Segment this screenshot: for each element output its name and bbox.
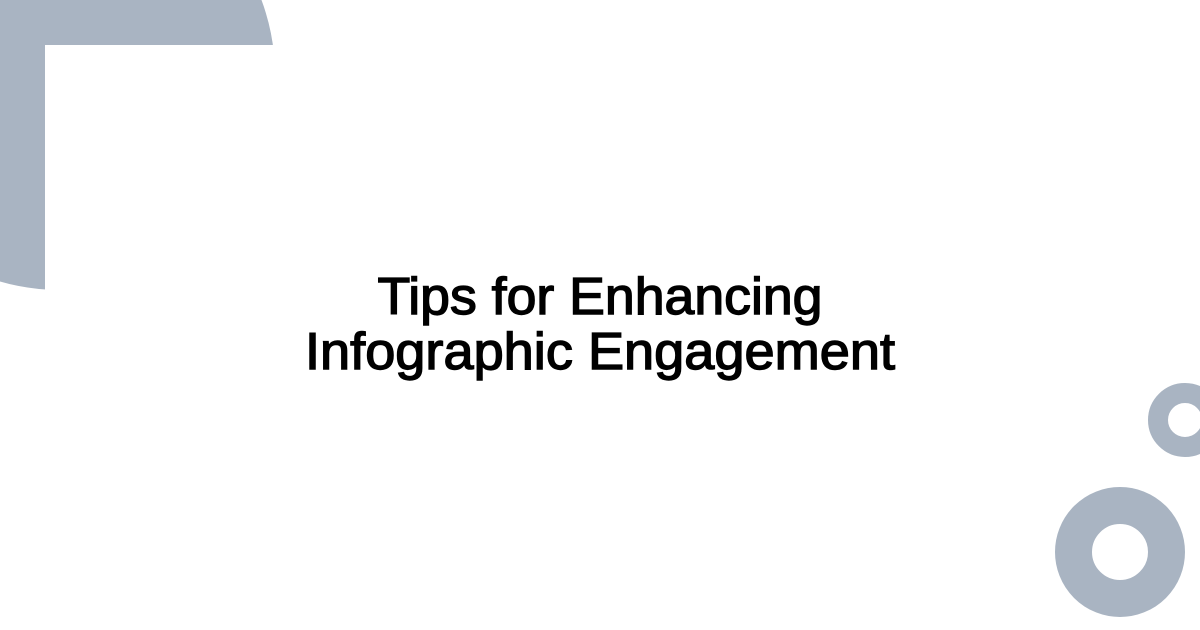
title: Infographic Engagement <box>305 323 896 381</box>
decoration: top-left quarter shape <box>0 0 445 445</box>
title <box>305 268 896 381</box>
decoration: large ring <box>1074 506 1166 598</box>
title: Tips for Enhancing <box>378 268 822 326</box>
decoration: small ring <box>1158 393 1200 447</box>
